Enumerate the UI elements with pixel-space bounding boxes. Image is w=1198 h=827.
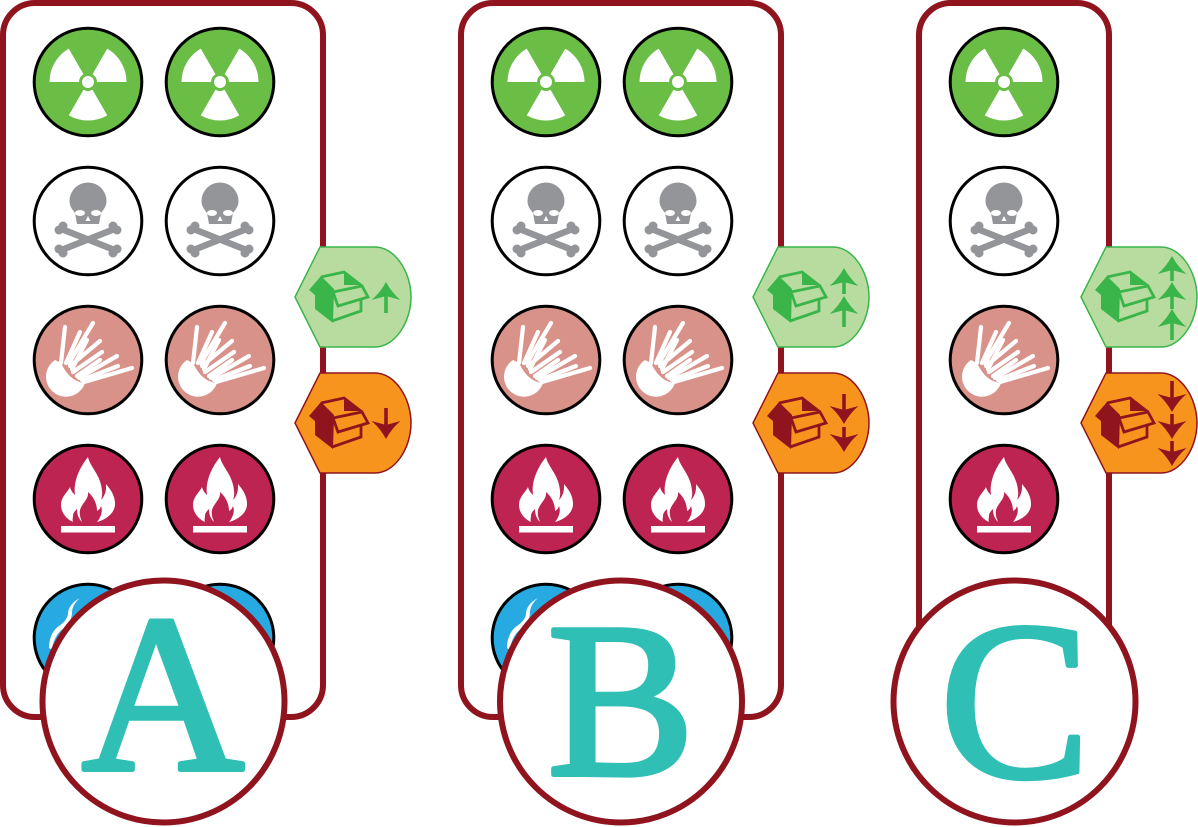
panel: group A xyxy=(3,3,323,717)
badge: A quantity up xyxy=(295,247,411,347)
badge: B quantity down xyxy=(753,373,869,473)
badge: C quantity down xyxy=(1081,373,1197,473)
badge: A quantity down xyxy=(295,373,411,473)
letter circle A xyxy=(42,568,284,822)
panel: group B xyxy=(461,3,781,717)
badge: C quantity up xyxy=(1081,247,1197,347)
letter circle C: C xyxy=(940,576,1090,826)
icons: group C hazards xyxy=(950,28,1058,553)
letter circle B: B xyxy=(547,578,695,822)
letter circle C xyxy=(894,576,1136,826)
icons: group A hazards xyxy=(34,28,274,692)
icons: group B hazards xyxy=(492,28,732,692)
panel: group C xyxy=(919,3,1109,717)
letter circle A: A xyxy=(82,568,244,818)
badge: B quantity up xyxy=(753,247,869,347)
letter circle B xyxy=(500,578,742,822)
